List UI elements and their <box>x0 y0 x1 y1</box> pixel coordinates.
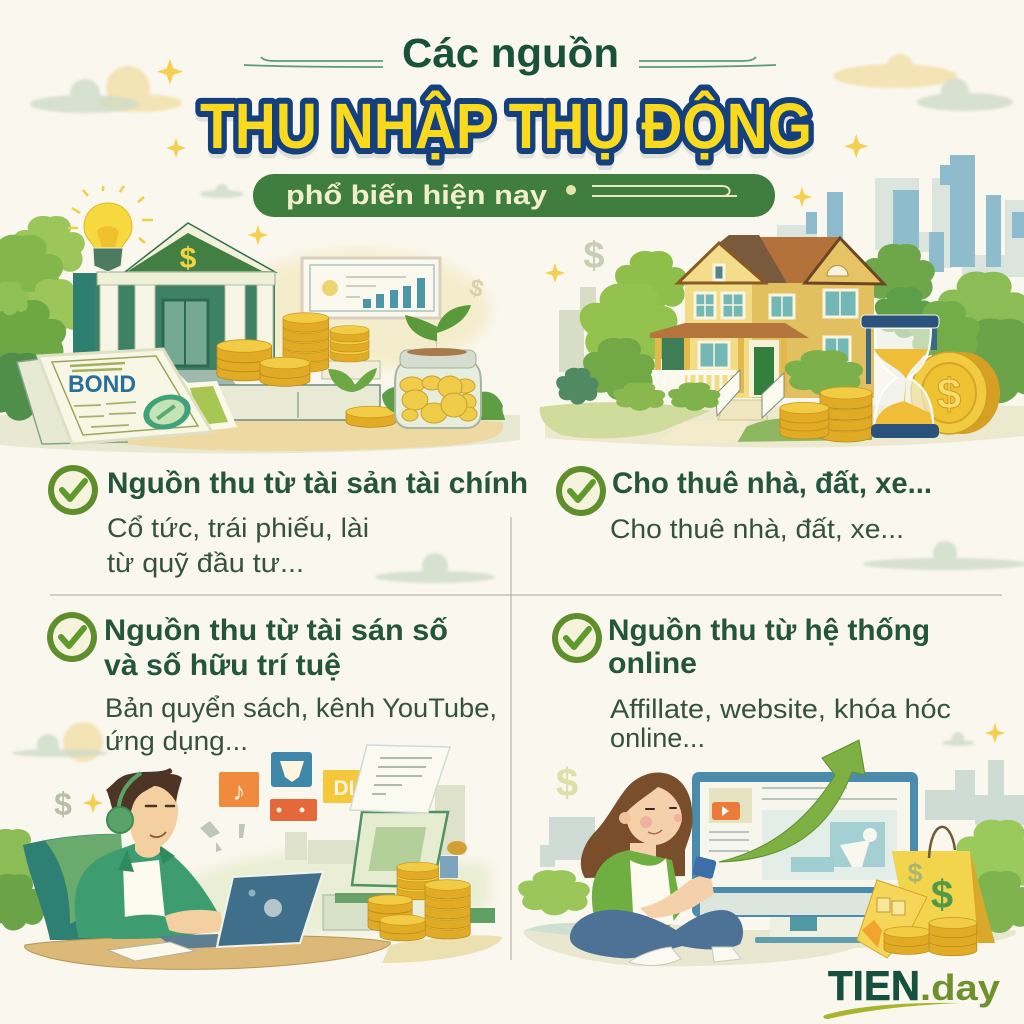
body text: Affillate, website, khóa hóc <box>610 694 951 724</box>
desktop screen <box>352 812 448 887</box>
logo: TIEN.day: TIEN <box>828 962 920 1009</box>
bushes <box>613 350 863 411</box>
clouds and sparkles <box>12 54 1024 813</box>
bond certificate: BOND <box>68 371 136 398</box>
light bulb <box>68 186 153 272</box>
background wash <box>190 785 502 963</box>
check icon <box>48 465 98 515</box>
check icon <box>47 612 97 662</box>
hourglass <box>861 315 939 438</box>
monitor <box>692 772 918 943</box>
coin stacks <box>780 387 872 442</box>
heading line 2: và số hữu trí tuệ <box>104 649 341 682</box>
coin stacks <box>368 862 470 941</box>
girl <box>570 772 743 965</box>
illustration: online income scene <box>518 740 1024 966</box>
roofs <box>759 237 840 283</box>
title: Các nguồn <box>244 30 776 76</box>
body text: Cổ tức, trái phiếu, lài <box>107 513 369 543</box>
illustration: rental house scene <box>540 155 1024 448</box>
bank building <box>73 223 275 373</box>
check icon <box>556 466 606 516</box>
coin stacks <box>217 313 396 427</box>
heading: Cho thuê nhà, đất, xe... <box>612 467 932 500</box>
shopping bag: $ <box>907 858 923 888</box>
skyline <box>540 760 1024 867</box>
illustration: financial assets scene <box>0 186 520 454</box>
ground wash <box>0 250 520 454</box>
check icon <box>552 613 602 663</box>
heading: Nguồn thu từ tài sán số <box>104 614 448 647</box>
subtitle pill: phổ biến hiện nay <box>286 180 547 210</box>
growth arrow <box>719 740 865 862</box>
title: Các nguồn: Các nguồn <box>402 30 619 76</box>
icon: music <box>219 772 259 807</box>
desk items <box>323 841 495 930</box>
dollar mark: $ <box>583 235 605 277</box>
heading line 2: online <box>608 647 697 680</box>
heading: Nguồn thu từ tài sản tài chính <box>107 467 528 500</box>
notebook <box>108 942 195 961</box>
title: THU NHẬP THỤ ĐỘNG: THU NHẬP THỤ ĐỘNG <box>200 89 812 162</box>
dollar mark: $ <box>54 786 72 822</box>
windows <box>695 265 857 368</box>
body text: Cho thuê nhà, đất, xe... <box>610 514 904 544</box>
body text line 2: ứng dụng... <box>105 726 248 756</box>
section: digital assets <box>47 612 497 756</box>
dollar mark: $ <box>556 761 578 805</box>
shopping bag <box>892 827 995 943</box>
porch <box>662 338 684 370</box>
bushes <box>518 820 1024 933</box>
table <box>25 935 390 969</box>
large dollar coin <box>911 352 1000 434</box>
icon: image <box>271 752 312 787</box>
shopping bag: $ <box>931 873 953 917</box>
leaf sprout beside coins <box>328 368 377 392</box>
boy <box>75 768 224 939</box>
icon: music: ♪ <box>232 776 246 806</box>
illustration: digital creator scene <box>0 745 502 969</box>
ground <box>540 402 1024 448</box>
icon: video <box>270 799 317 821</box>
app icons <box>219 752 365 821</box>
bush <box>0 829 46 930</box>
tree <box>0 216 87 421</box>
section: online systems <box>552 613 951 753</box>
background wash <box>524 923 1016 966</box>
logo: TIEN.day <box>823 962 1000 1019</box>
stone steps <box>175 361 380 420</box>
floating scribbles <box>200 821 245 852</box>
section: rentals <box>556 466 932 544</box>
bank building: $ <box>180 242 197 275</box>
coin stacks <box>884 917 977 956</box>
dividers <box>50 517 1002 960</box>
body text line 2: từ quỹ đầu tư... <box>107 548 304 578</box>
logo: TIEN.day: .day <box>920 967 1000 1008</box>
heading: Nguồn thu từ hệ thống <box>608 614 930 647</box>
small dollar: $ <box>466 274 487 303</box>
section: financial assets <box>48 465 528 578</box>
laptop <box>158 872 323 949</box>
house <box>650 235 884 420</box>
subtitle pill <box>253 174 775 217</box>
bond certificate <box>17 349 237 444</box>
large dollar coin: $ <box>937 370 961 419</box>
coin jar with plant <box>395 305 481 428</box>
icon: document: DI <box>334 777 354 800</box>
armchair <box>23 834 125 940</box>
jar side leaves <box>382 387 505 420</box>
body text: Bản quyển sách, kênh YouTube, <box>105 693 497 723</box>
trees <box>556 244 1024 405</box>
icon: document <box>323 770 365 803</box>
chart board <box>302 258 440 318</box>
document sheet <box>350 745 450 813</box>
title: THU NHẬP THỤ ĐỘNG: THU NHẬP THỤ ĐỘNG <box>200 94 812 167</box>
body text line 2: online... <box>610 723 705 753</box>
city skyline <box>559 155 1024 372</box>
gold box <box>857 880 927 958</box>
railing <box>652 370 736 375</box>
